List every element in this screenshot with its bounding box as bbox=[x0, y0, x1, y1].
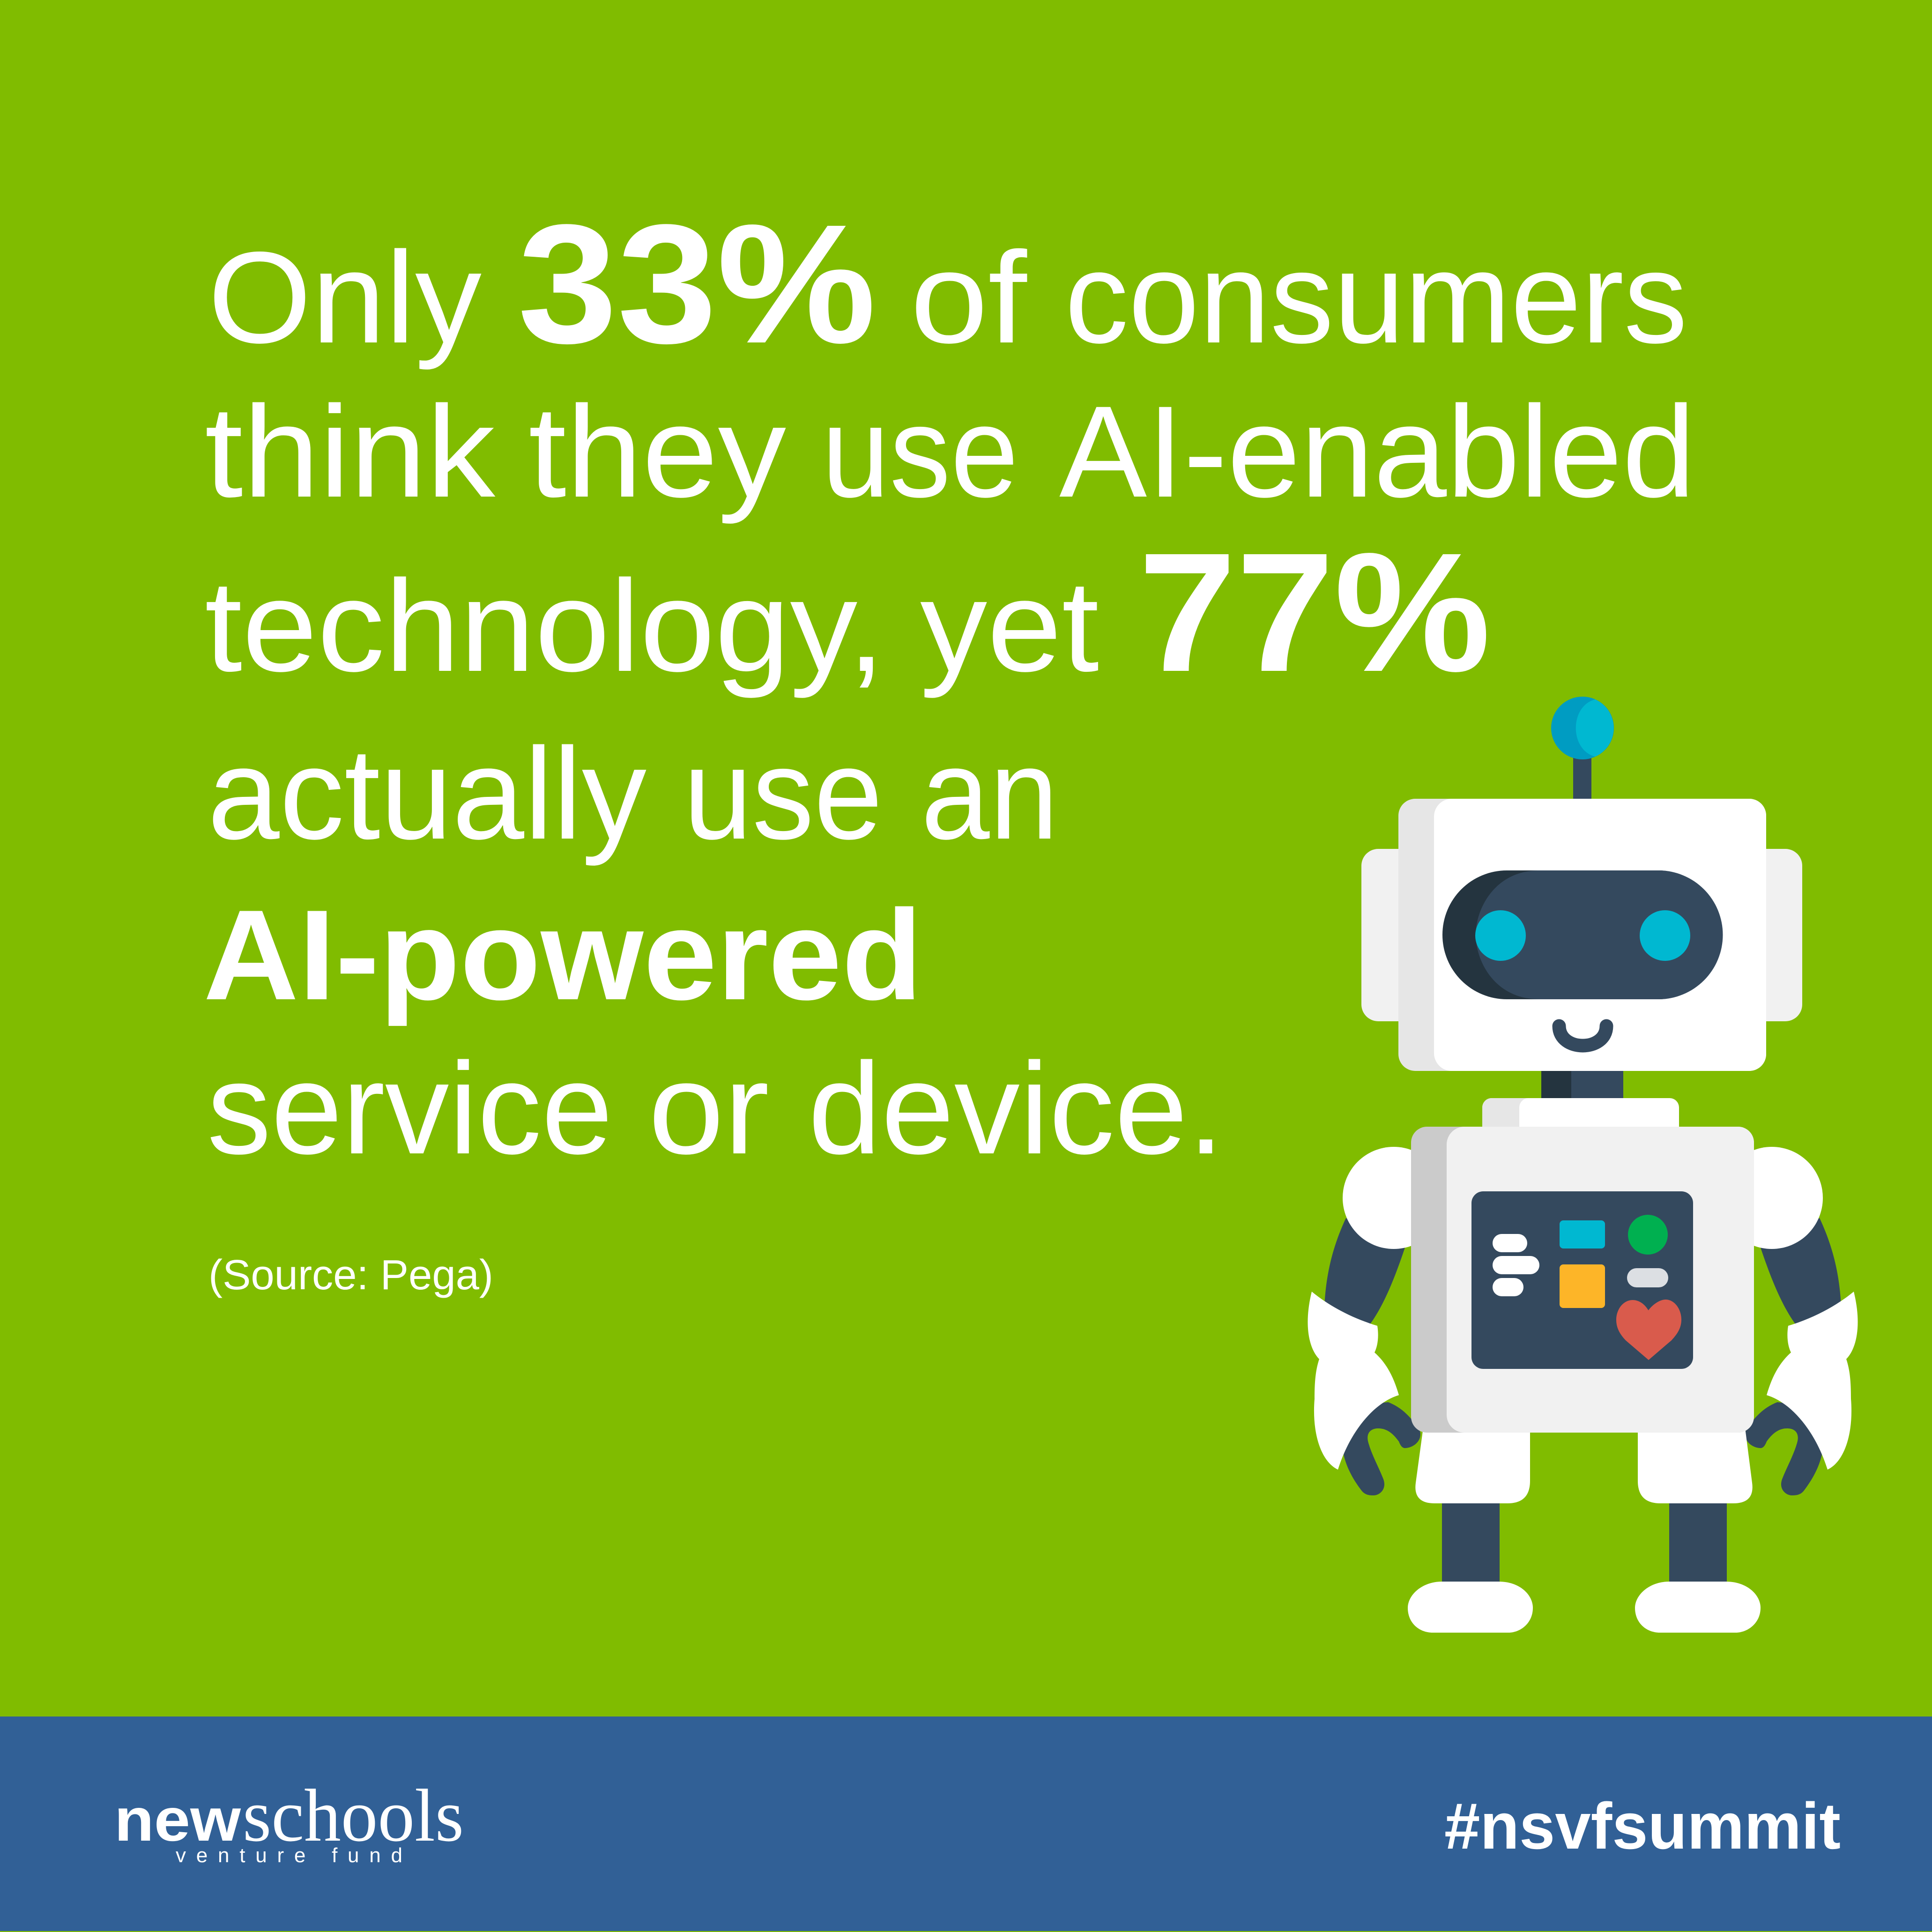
antenna bbox=[1551, 697, 1614, 801]
right leg bbox=[1635, 1424, 1761, 1633]
left leg bbox=[1408, 1424, 1533, 1633]
right arm bbox=[1721, 1147, 1858, 1495]
headline text block: AI-powered bbox=[203, 884, 922, 1027]
heart bbox=[1616, 1300, 1681, 1360]
logo: newschools venture fund bbox=[114, 1774, 464, 1867]
footer band bbox=[0, 1717, 1932, 1931]
mouth bbox=[1559, 1026, 1606, 1046]
cyan button bbox=[1560, 1220, 1605, 1248]
headline text block: service bbox=[207, 1035, 613, 1181]
neck bbox=[1541, 1063, 1623, 1103]
grey pill bbox=[1627, 1268, 1668, 1287]
collar bbox=[1482, 1098, 1679, 1134]
visor bbox=[1442, 870, 1723, 999]
white bars bbox=[1493, 1234, 1539, 1296]
headline text block: yet bbox=[920, 553, 1100, 699]
logo: newschools venture fund: new bbox=[114, 1785, 241, 1854]
headline text block: of bbox=[910, 224, 1027, 370]
logo: newschools venture fund: venture fund bbox=[176, 1844, 402, 1867]
ears bbox=[1361, 849, 1802, 1021]
source note: (Source: Pega) bbox=[208, 1252, 493, 1299]
torso bbox=[1411, 1127, 1754, 1433]
headline text block: Only bbox=[208, 224, 482, 371]
left arm bbox=[1308, 1147, 1445, 1495]
green light bbox=[1628, 1215, 1668, 1255]
headline text block: AI-enabled bbox=[1059, 379, 1695, 524]
robot illustration bbox=[1308, 697, 1858, 1633]
headline text block: device. bbox=[808, 1035, 1224, 1181]
headline text block: technology, bbox=[205, 553, 885, 699]
headline text block: use bbox=[822, 379, 1018, 524]
headline text block: or bbox=[648, 1035, 769, 1181]
headline text block: 33% bbox=[518, 189, 876, 379]
logo: newschools venture fund: schools bbox=[243, 1774, 464, 1857]
headline text block: think bbox=[205, 379, 498, 524]
headline text block: they bbox=[528, 379, 786, 525]
orange button bbox=[1560, 1264, 1605, 1308]
headline text block: use bbox=[684, 721, 883, 866]
chest panel bbox=[1471, 1191, 1693, 1369]
headline text block: an bbox=[921, 721, 1058, 866]
headline text block: 77% bbox=[1138, 517, 1491, 707]
headline text block bbox=[203, 189, 1695, 1181]
headline text block: actually bbox=[208, 721, 646, 867]
head bbox=[1398, 799, 1766, 1071]
hashtag: #nsvfsummit bbox=[1444, 1789, 1841, 1863]
headline text block: consumers bbox=[1065, 224, 1687, 370]
